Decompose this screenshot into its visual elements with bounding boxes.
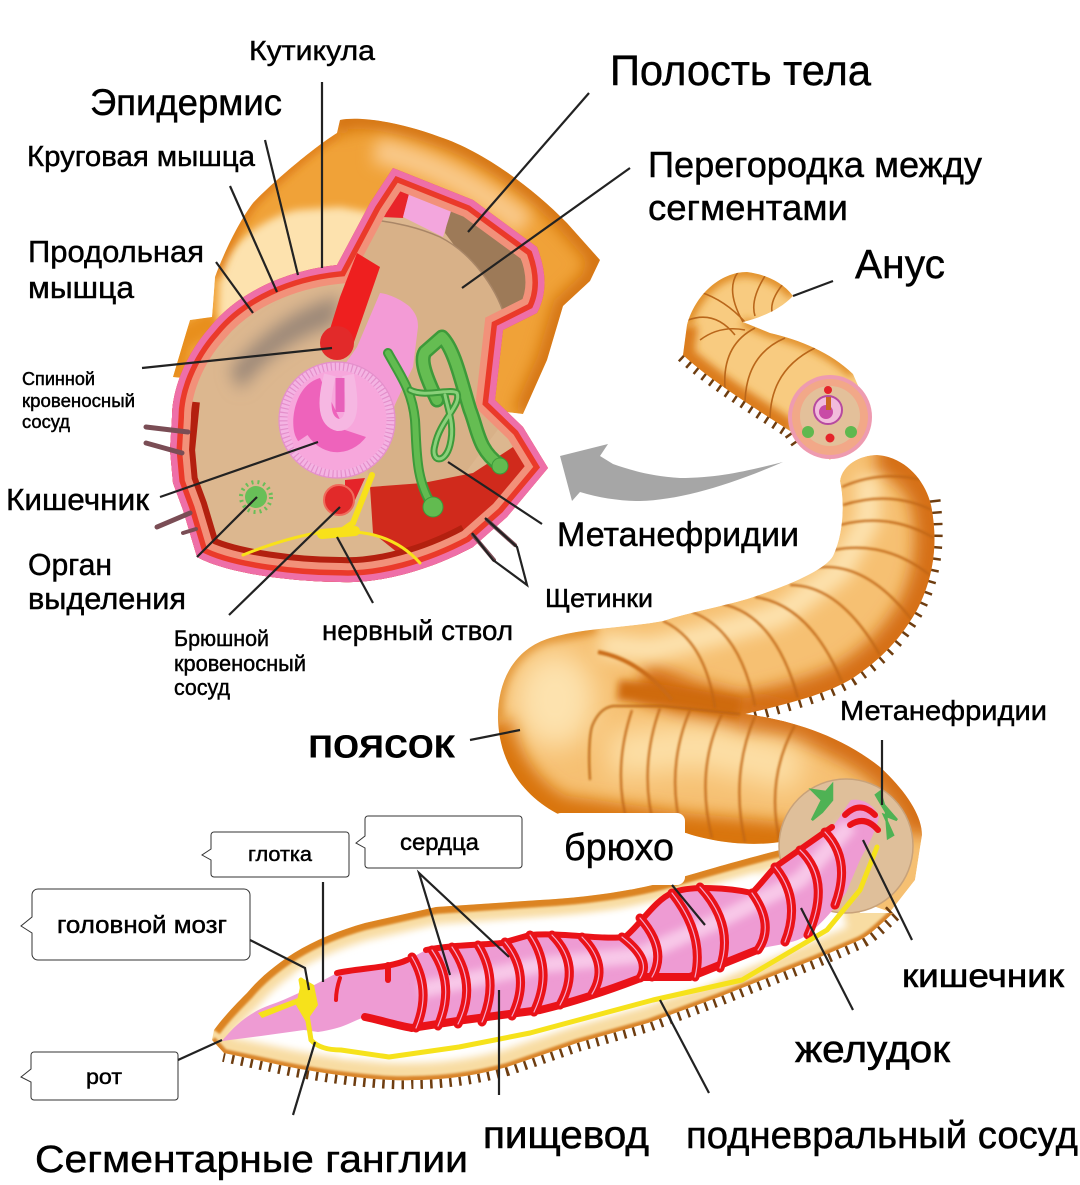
septum rim bbox=[382, 220, 503, 310]
dark band above the lower coil bbox=[618, 690, 740, 708]
callout box: глотка bbox=[202, 832, 349, 877]
label: Перегородка между сегментами: сегментами bbox=[648, 187, 848, 228]
label: Брюшной кровеносный сосуд: кровеносный bbox=[174, 651, 306, 676]
illustration: dissected anterior part of the worm bbox=[212, 779, 913, 1080]
label: поясок: поясок bbox=[308, 722, 455, 766]
callout box: глотка: глотка bbox=[248, 844, 313, 866]
label: Анус: Анус bbox=[855, 241, 945, 287]
tail piece bbox=[683, 272, 872, 460]
nerve cord bbox=[243, 475, 420, 563]
tube highlight bbox=[420, 825, 850, 990]
label: Продольная мышца bbox=[28, 234, 253, 313]
label: подневральный сосуд: подневральный сосуд bbox=[686, 1115, 1078, 1157]
label: Метанефридии (section): Метанефридии bbox=[557, 516, 799, 554]
label: Щетинки: Щетинки bbox=[545, 583, 653, 613]
label: Спинной кровеносный сосуд: кровеносный bbox=[22, 391, 135, 411]
bristles on the main body bbox=[745, 500, 935, 716]
pink digestive tube bbox=[222, 800, 879, 1041]
label: поясок bbox=[308, 722, 520, 766]
tail cut face bbox=[788, 375, 872, 459]
label: Эпидермис bbox=[90, 82, 298, 275]
fold crease at the clitellum bbox=[598, 652, 672, 700]
bristles on the tail piece bbox=[683, 355, 800, 445]
callout box: сердца: сердца bbox=[400, 829, 479, 855]
callout box: сердца bbox=[356, 816, 522, 868]
callout box: головной мозг bbox=[21, 889, 250, 960]
label: Брюшной кровеносный сосуд bbox=[174, 507, 340, 700]
illustration: whole earthworm body with bristles bbox=[498, 272, 935, 912]
label: пищевод: пищевод bbox=[483, 1114, 649, 1157]
intestine stem bbox=[340, 293, 418, 440]
callout box: рот: рот bbox=[86, 1066, 122, 1089]
label: Эпидермис: Эпидермис bbox=[90, 82, 282, 123]
excretory organ bbox=[241, 482, 271, 512]
lower coil top edge bbox=[589, 706, 740, 780]
upper tube bbox=[384, 192, 409, 218]
label: нервный ствол bbox=[322, 537, 513, 646]
label: Продольная мышца: Продольная bbox=[28, 234, 204, 269]
shaded wall bbox=[230, 296, 340, 390]
septum bbox=[456, 248, 502, 310]
label: Кишечник bbox=[6, 442, 318, 517]
label: Сегментарные ганглии bbox=[35, 1042, 468, 1181]
label: Спинной кровеносный сосуд: Спинной bbox=[22, 369, 95, 389]
label: Круговая мышца bbox=[27, 141, 277, 292]
intestine ring bbox=[279, 362, 395, 478]
body shell bbox=[212, 850, 893, 1080]
orange body behind section bbox=[173, 119, 600, 414]
callout box: рот bbox=[21, 1052, 178, 1100]
lower dark wall band bbox=[170, 400, 473, 582]
label: Кишечник: Кишечник bbox=[6, 482, 149, 517]
label: Спинной кровеносный сосуд: сосуд bbox=[22, 412, 70, 432]
illustration: cross-section of a worm segment bbox=[146, 119, 600, 582]
callout box: головной мозг: головной мозг bbox=[57, 912, 227, 939]
label: Полость тела bbox=[468, 47, 871, 232]
label box: брюхо: брюхо bbox=[564, 827, 674, 869]
label: Анус bbox=[793, 241, 945, 296]
label: Кутикула: Кутикула bbox=[249, 35, 375, 66]
label: Круговая мышца: Круговая мышца bbox=[27, 141, 256, 173]
brown body cavity bbox=[445, 212, 526, 309]
label: Перегородка между сегментами bbox=[462, 144, 982, 288]
label: Орган выделения bbox=[28, 497, 257, 616]
label: Брюшной кровеносный сосуд: сосуд bbox=[174, 675, 230, 700]
leader lines for the callout boxes bbox=[178, 873, 705, 1060]
cut face of anterior part bbox=[779, 779, 913, 913]
setae bbox=[146, 427, 515, 560]
red vessels and hearts bbox=[336, 808, 878, 1028]
coelom floor red bbox=[370, 447, 525, 551]
cerebral ganglion bbox=[258, 978, 318, 1022]
label: Щетинки bbox=[472, 518, 653, 613]
metanephridia bbox=[388, 337, 508, 517]
label: Спинной кровеносный сосуд bbox=[22, 348, 332, 432]
dorsal blood vessel bbox=[320, 253, 380, 360]
label: кишечник bbox=[863, 840, 1065, 994]
label: Перегородка между сегментами: Перегородка между bbox=[648, 144, 982, 185]
label: Орган выделения: Орган bbox=[28, 547, 112, 582]
label: Метанефридии (section) bbox=[448, 462, 799, 554]
label: желудок: желудок bbox=[795, 1029, 950, 1071]
label: кишечник: кишечник bbox=[902, 957, 1065, 994]
ventral blood vessel bbox=[324, 478, 365, 515]
section interior and body wall layers bbox=[170, 168, 548, 582]
label: нервный ствол: нервный ствол bbox=[322, 615, 513, 646]
label: Полость тела: Полость тела bbox=[610, 47, 871, 95]
ventral nerve cord bbox=[301, 847, 877, 1057]
label: Метанефридии (body): Метанефридии bbox=[840, 695, 1047, 726]
label: подневральный сосуд bbox=[660, 1000, 1078, 1157]
label: Орган выделения: выделения bbox=[28, 581, 186, 616]
label: желудок bbox=[795, 908, 950, 1071]
label box: брюхо bbox=[553, 813, 685, 885]
segment grooves bbox=[621, 476, 934, 842]
upper and lower coil of the body bbox=[498, 455, 934, 912]
wall layers bbox=[170, 168, 548, 582]
label: Сегментарные ганглии: Сегментарные ганглии bbox=[35, 1139, 468, 1181]
label: Брюшной кровеносный сосуд: Брюшной bbox=[174, 626, 269, 651]
label: Продольная мышца: мышца bbox=[28, 270, 135, 305]
arrow: grey curved arrow bbox=[560, 444, 783, 501]
bristles on lower edge bbox=[224, 913, 893, 1080]
